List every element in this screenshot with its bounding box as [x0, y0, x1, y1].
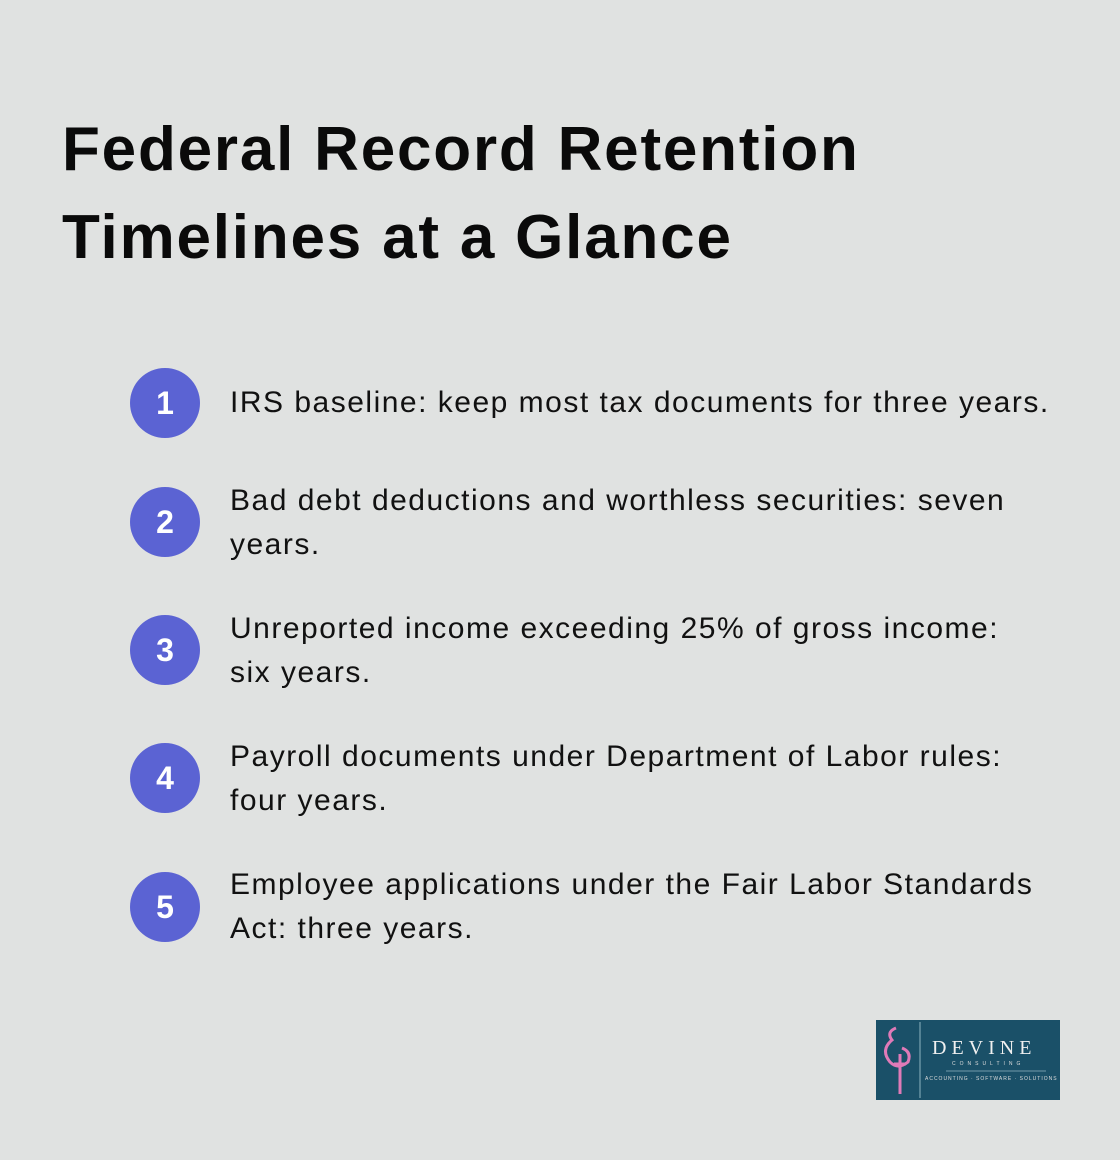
item 4 [130, 740, 1002, 817]
item 3 [130, 612, 999, 689]
logo: CONSULTING [952, 1061, 1024, 1067]
logo [876, 1020, 1060, 1100]
logo: DEVINE [932, 1037, 1036, 1059]
item 1 [130, 368, 1050, 438]
item 5 [130, 868, 1033, 945]
item 4: four years. [230, 784, 388, 817]
item 4: Payroll documents under Department of Labor rules: [230, 740, 1002, 773]
item 3: Unreported income exceeding 25% of gross income: [230, 612, 999, 645]
item 3: six years. [230, 656, 372, 689]
item 3: 3 [156, 632, 174, 668]
item 2: Bad debt deductions and worthless securities: seven [230, 484, 1005, 517]
item 4: 4 [156, 760, 174, 796]
item 5: Act: three years. [230, 912, 474, 945]
title: Federal Record Retention [62, 115, 860, 184]
title: Timelines at a Glance [62, 203, 733, 272]
item 5: 5 [156, 889, 174, 925]
title [62, 115, 860, 272]
logo: ACCOUNTING · SOFTWARE · SOLUTIONS [925, 1076, 1058, 1082]
icon: flamingo [885, 1028, 909, 1094]
item 2: years. [230, 528, 321, 561]
item 2: 2 [156, 504, 174, 540]
item 2 [130, 484, 1005, 561]
item 1: 1 [156, 385, 174, 421]
item 5: Employee applications under the Fair Labor Standards [230, 868, 1033, 901]
item 1: IRS baseline: keep most tax documents for three years. [230, 386, 1050, 419]
